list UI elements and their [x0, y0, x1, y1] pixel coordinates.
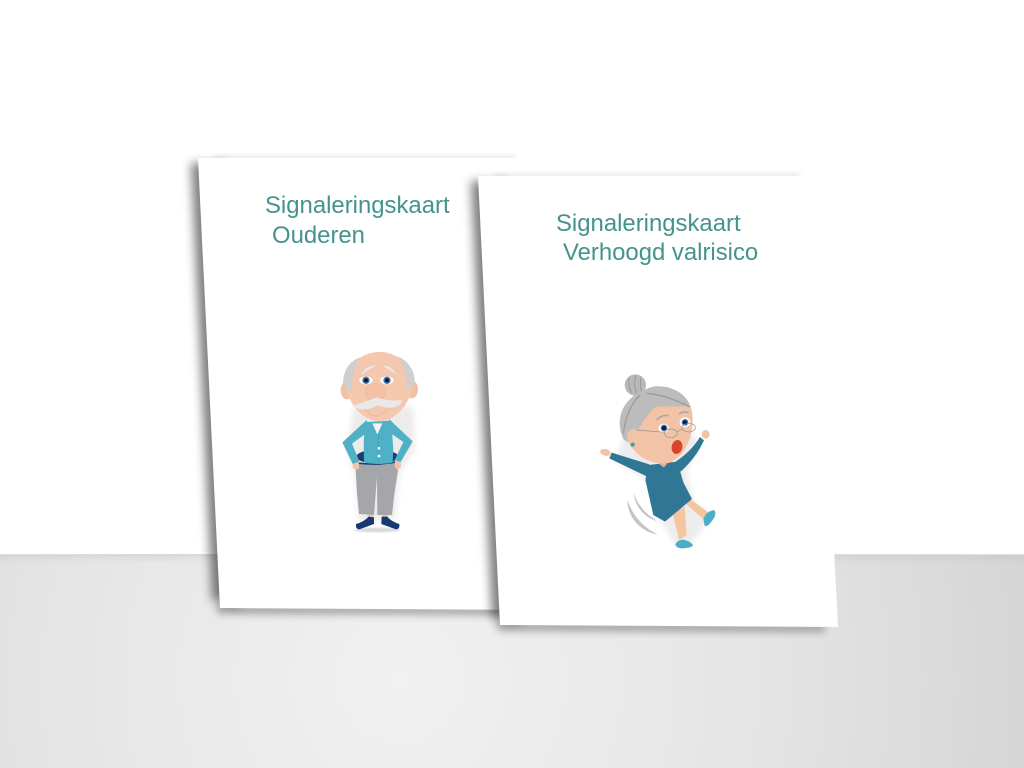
- moustache: [352, 397, 402, 409]
- ankles: [367, 515, 388, 519]
- face: [627, 406, 693, 463]
- mouth: [670, 439, 684, 455]
- title: Signaleringskaart Verhoogd valrisico: Verhoogd valrisico: [563, 239, 758, 266]
- title: Signaleringskaart Verhoogd valrisico: [556, 210, 758, 266]
- shoe shadows: [354, 528, 401, 532]
- waistband: [356, 450, 398, 464]
- hair: [343, 357, 360, 392]
- mouth: [365, 409, 388, 416]
- ears: [341, 381, 353, 399]
- shoes: [356, 517, 374, 529]
- earring: [631, 443, 635, 447]
- hair strands: [647, 393, 690, 407]
- figure shadow: [347, 407, 415, 522]
- dress: [645, 462, 692, 522]
- hair bun: [625, 374, 646, 396]
- vest: [364, 421, 393, 464]
- legs: [673, 507, 687, 540]
- eyes: [359, 376, 373, 384]
- hands: [599, 448, 611, 457]
- head: [346, 352, 412, 421]
- collar: [372, 423, 382, 435]
- hair: [620, 386, 691, 445]
- eyebrows: [657, 415, 669, 420]
- hands: [353, 461, 359, 470]
- title: Signaleringskaart Ouderen: Signaleringskaart: [265, 192, 450, 219]
- card: Verhoogd valrisico: [471, 173, 838, 632]
- glasses: [637, 423, 695, 438]
- arms: [609, 453, 649, 476]
- illustration: elderly woman falling: [599, 374, 715, 548]
- arms: [342, 420, 368, 464]
- illustration: elderly man: [341, 352, 418, 532]
- shoes: [703, 510, 715, 526]
- title: Signaleringskaart Ouderen: Ouderen: [272, 222, 365, 249]
- card: Ouderen: [191, 155, 540, 615]
- title: Signaleringskaart Verhoogd valrisico: Signaleringskaart: [556, 210, 741, 237]
- figure shadow: [613, 425, 713, 545]
- trousers: [355, 461, 399, 515]
- eyebrows: [361, 365, 377, 375]
- buttons: [378, 447, 380, 450]
- nose: [365, 384, 386, 401]
- motion lines: [627, 500, 658, 535]
- title: Signaleringskaart Ouderen: [265, 192, 450, 249]
- eyes: [659, 424, 669, 433]
- neck: [656, 460, 670, 468]
